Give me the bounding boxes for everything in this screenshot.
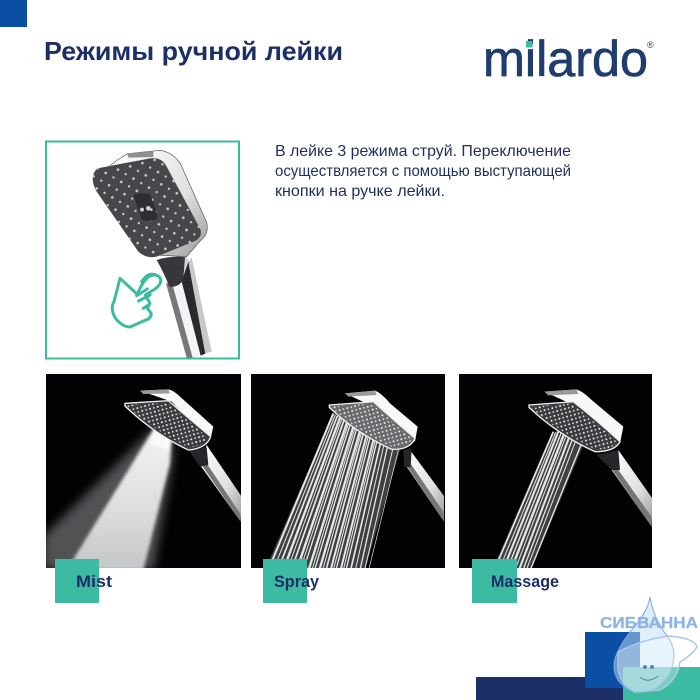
label: Massage (472, 559, 559, 603)
icon: shower handle (403, 448, 444, 522)
title: Режимы ручной лейки (44, 36, 343, 66)
label: Mist (55, 559, 112, 603)
icon: shower head face (93, 158, 201, 257)
icon: pressing hand (112, 274, 161, 327)
icon: handle collar (157, 257, 185, 287)
label: Mist: Mist (76, 572, 112, 591)
description text (275, 143, 571, 200)
panel: Massage photo (459, 374, 652, 570)
icon: mist water cone (43, 423, 173, 570)
watermark: Сибванна (600, 597, 698, 692)
icon: massage water jets (492, 432, 583, 570)
label: Massage: Massage (491, 572, 559, 591)
watermark: Сибванна: СИБВАННА (600, 615, 698, 632)
logo: milardo: ® (647, 40, 654, 50)
footer decorative blocks (476, 632, 700, 700)
description text: осуществляется с помощью выступающей (275, 163, 571, 180)
panel: hand shower product photo (46, 142, 239, 358)
icon: shower handle (597, 450, 652, 527)
icon: shower head (529, 389, 623, 452)
description text: В лейке 3 режима струй. Переключение (275, 143, 571, 160)
icon: shower head (125, 389, 213, 450)
icon: shower handle (166, 255, 212, 358)
icon: shower handle (188, 445, 242, 522)
panel: Mist photo (43, 374, 242, 570)
icon: shower head (329, 391, 418, 449)
corner square (0, 0, 27, 27)
description text: кнопки на ручке лейки. (275, 183, 445, 200)
logo: milardo: milardo (483, 31, 648, 87)
icon: spray water jets (265, 413, 400, 570)
panel: Spray photo (251, 374, 445, 570)
label: Spray: Spray (274, 572, 320, 591)
icon: shower head back (107, 150, 207, 257)
label: Spray (263, 559, 320, 603)
